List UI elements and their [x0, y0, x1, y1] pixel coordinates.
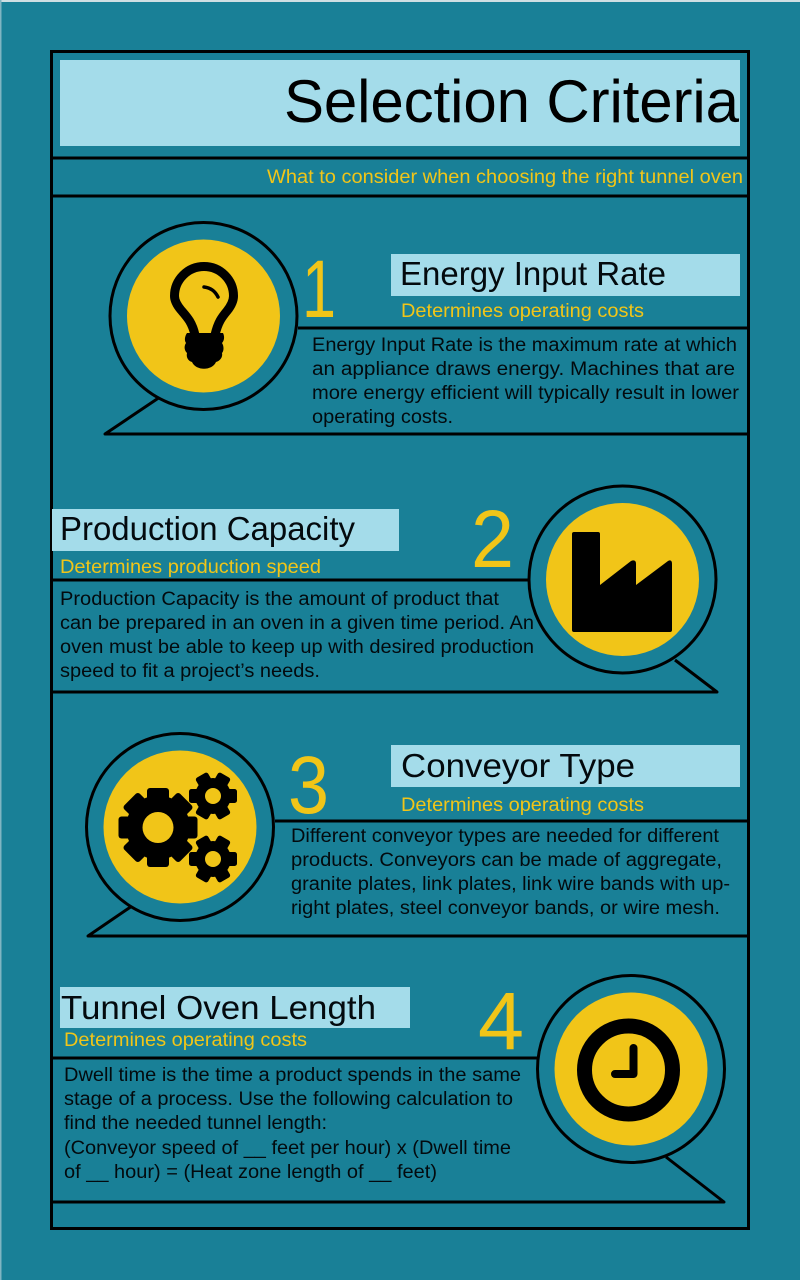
- icon: gears: [118, 772, 237, 883]
- speech bubble 3: [88, 821, 749, 936]
- speech bubble 2: [51, 580, 717, 692]
- body text 2: oven must be able to keep up with desired production: [60, 636, 534, 658]
- body text 2: Production Capacity is the amount of product that: [60, 588, 500, 610]
- body text 2: can be prepared in an oven in a given time period. An: [60, 612, 534, 634]
- icon: factory: [572, 532, 672, 632]
- heading banner 4: Tunnel Oven Length: [61, 990, 376, 1027]
- tagline 3: Determines operating costs: [401, 794, 644, 816]
- heading banner 2: Production Capacity: [60, 511, 355, 548]
- body text 1: an appliance draws energy. Machines that are: [312, 358, 735, 380]
- badge 2: [529, 486, 716, 673]
- body text 4: stage of a process. Use the following calculation to: [64, 1088, 513, 1110]
- tagline 2: Determines production speed: [60, 556, 321, 578]
- small gear bottom: [189, 835, 237, 883]
- number 2: 2: [471, 494, 514, 585]
- speech bubble 1: [105, 328, 749, 434]
- body text 4: (Conveyor speed of __ feet per hour) x (Dwell time: [64, 1137, 511, 1159]
- heading banner 1: Energy Input Rate: [400, 256, 666, 293]
- subtitle: What to consider when choosing the right tunnel oven: [267, 166, 743, 188]
- body text 2: speed to fit a project’s needs.: [60, 660, 320, 682]
- body text 1: [312, 334, 739, 428]
- panel: energy input rate: [105, 222, 749, 434]
- number 4: 4: [478, 976, 524, 1067]
- body text 4: Dwell time is the time a product spends in the same: [64, 1064, 521, 1086]
- icon: light bulb: [174, 266, 234, 369]
- body text 3: right plates, steel conveyor bands, or wire mesh.: [291, 897, 720, 919]
- badge 4: [538, 976, 724, 1162]
- body text 2: [60, 588, 534, 682]
- number 3: 3: [288, 740, 329, 831]
- body text 3: Different conveyor types are needed for different: [291, 825, 720, 847]
- large gear: [118, 788, 198, 867]
- panel: tunnel oven length: [51, 976, 724, 1202]
- tagline 4: Determines operating costs: [64, 1029, 307, 1051]
- heading banner 1: [391, 254, 740, 296]
- panel: production capacity: [51, 486, 717, 692]
- panel: conveyor type: [86, 734, 749, 936]
- body text 3: granite plates, link plates, link wire bands with up-: [291, 873, 730, 895]
- badge 3: [86, 734, 274, 920]
- heading banner 3: Conveyor Type: [401, 748, 635, 785]
- number 1: 1: [302, 244, 336, 335]
- icon: clock: [584, 1026, 672, 1114]
- body text 3: products. Conveyors can be made of aggregate,: [291, 849, 722, 871]
- body text 4: find the needed tunnel length:: [64, 1112, 327, 1134]
- body text 1: more energy efficient will typically result in lower: [312, 382, 739, 404]
- tagline 1: Determines operating costs: [401, 300, 644, 322]
- body text 3: [291, 825, 730, 919]
- body text 1: Energy Input Rate is the maximum rate at which: [312, 334, 737, 356]
- body text 4: [64, 1064, 521, 1183]
- small gear top: [189, 772, 237, 820]
- speech bubble 4: [51, 1058, 724, 1202]
- body text 1: operating costs.: [312, 406, 453, 428]
- title banner: [60, 60, 740, 146]
- badge 1: [110, 222, 297, 410]
- title: Selection Criteria: [284, 68, 740, 135]
- heading banner 3: [391, 745, 740, 787]
- body text 4: of __ hour) = (Heat zone length of __ feet): [64, 1161, 437, 1183]
